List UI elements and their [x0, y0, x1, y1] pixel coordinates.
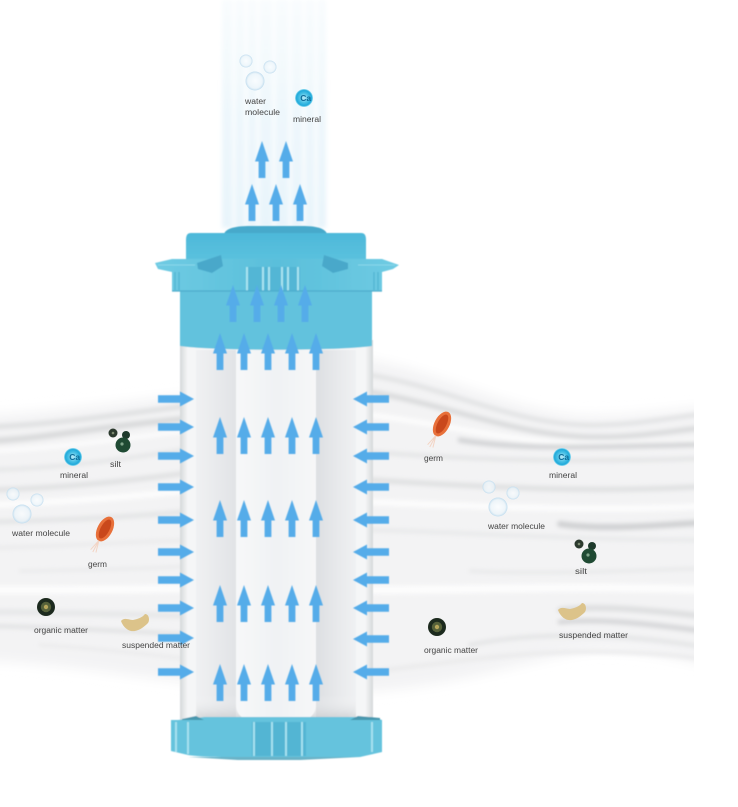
left: suspended matter: suspended matter	[122, 641, 190, 650]
arrows: through the cap	[226, 285, 312, 322]
top stream: water molecule: water	[244, 97, 266, 106]
arrows: rising through the filter core	[213, 333, 323, 701]
right: mineral: mineral	[549, 471, 577, 480]
left: germ: germ	[88, 560, 107, 569]
flange with side tabs	[155, 259, 399, 291]
right: water molecule: water molecule	[487, 522, 546, 531]
lid clips	[197, 255, 348, 273]
top stream: mineral: mineral	[293, 115, 321, 124]
left: germ	[86, 514, 118, 569]
right: mineral	[549, 448, 577, 480]
left water flow band	[0, 402, 180, 678]
right: organic matter	[424, 618, 478, 655]
right: organic matter: organic matter	[424, 646, 478, 655]
top stream: water molecule	[240, 54, 281, 117]
right water flow band	[372, 364, 694, 688]
arrows: inflow from right	[353, 392, 389, 680]
top stream: mineral	[293, 89, 321, 124]
left: silt: silt	[110, 460, 122, 469]
bottom base	[171, 716, 382, 760]
clear housing	[180, 340, 373, 725]
right: silt: silt	[575, 567, 588, 576]
pleated filter core	[236, 345, 316, 720]
left: suspended matter	[121, 614, 190, 650]
pleated filter outer	[196, 350, 356, 719]
arrows: purified water exiting	[245, 141, 307, 221]
top stream: water molecule: molecule	[245, 108, 281, 117]
right: water molecule	[482, 480, 546, 531]
lower cap sleeve	[180, 290, 372, 350]
right: germ: germ	[424, 454, 443, 463]
right: suspended matter	[558, 603, 628, 640]
right: germ	[423, 409, 455, 463]
left: organic matter: organic matter	[34, 626, 88, 635]
right: suspended matter: suspended matter	[559, 631, 628, 640]
right: silt	[574, 540, 596, 576]
arrows: inflow from left	[158, 392, 194, 680]
left: mineral	[60, 448, 88, 480]
filter cartridge	[155, 226, 399, 760]
top lid	[186, 226, 366, 264]
left: mineral: mineral	[60, 471, 88, 480]
left: silt	[108, 428, 130, 469]
left: organic matter	[34, 598, 88, 635]
left: water molecule	[6, 488, 71, 538]
water stream rising from the filter	[222, 0, 326, 228]
left: water molecule: water molecule	[11, 529, 71, 538]
